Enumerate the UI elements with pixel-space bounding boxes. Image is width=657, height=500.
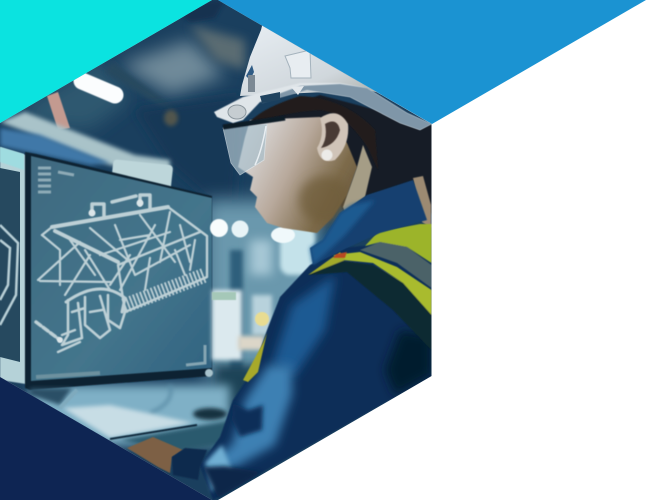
lower dark area — [385, 330, 432, 395]
hat dome — [240, 26, 377, 96]
neck skin sliver — [413, 176, 431, 228]
left monitor — [0, 147, 26, 384]
desk and keyboard — [30, 385, 232, 452]
monitor knobs — [88, 210, 96, 216]
safety glasses — [223, 124, 267, 175]
hat slot — [246, 65, 254, 78]
face — [238, 117, 357, 233]
collar — [310, 180, 427, 265]
hair back — [250, 95, 432, 215]
monitor menu — [38, 168, 74, 192]
hat mount — [285, 50, 311, 78]
ear — [317, 113, 348, 161]
pink pipe — [47, 92, 70, 130]
hard hat — [214, 22, 432, 130]
blonde hair strands — [343, 145, 372, 212]
accent: blue corner band — [218, 0, 646, 124]
bright cylinder — [112, 160, 174, 187]
ceiling light — [82, 81, 115, 95]
cad wireframe — [36, 195, 207, 352]
cheek shadow — [299, 176, 351, 224]
hat brim — [214, 83, 432, 130]
jacket body — [200, 240, 432, 500]
hi-vis vest — [243, 224, 432, 382]
photo: engineer at workstation — [0, 0, 432, 500]
blue bar — [0, 128, 110, 165]
bokeh lights — [210, 219, 315, 360]
accent: cyan corner triangle — [0, 0, 212, 123]
accent: navy corner triangle — [0, 377, 212, 500]
hand on desk — [127, 437, 207, 480]
woman — [200, 95, 432, 500]
factory background — [0, 0, 432, 500]
main monitor — [25, 152, 213, 390]
dark hair top — [250, 96, 378, 170]
brim shaded side — [262, 84, 432, 130]
sleeve highlights — [272, 275, 335, 375]
beam behind monitors — [0, 112, 170, 175]
sleeve fold — [232, 403, 263, 437]
brim inner oval — [228, 105, 246, 119]
